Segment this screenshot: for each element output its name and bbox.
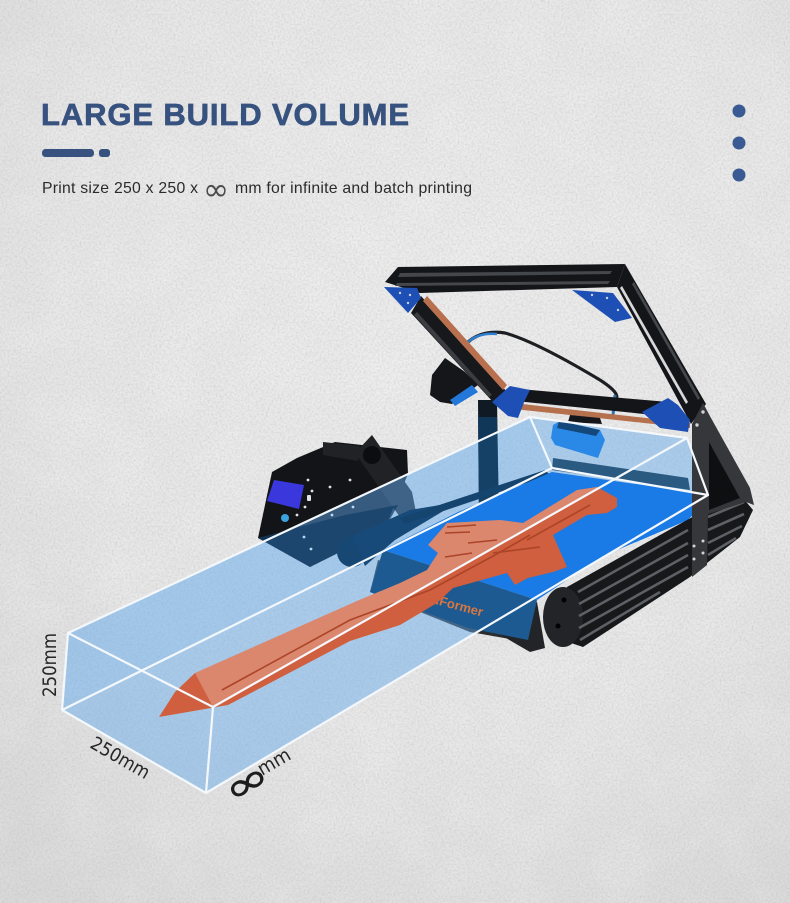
dimension label: infinite length: ∞ xyxy=(215,751,278,815)
rivets seen through the volume xyxy=(303,506,354,550)
print head carriage xyxy=(430,358,478,404)
dimension label: width: 250mm xyxy=(86,733,153,784)
blue build plate xyxy=(370,472,712,640)
roller arm xyxy=(337,470,550,567)
dimension label: height: 250mm xyxy=(40,633,61,697)
right upright xyxy=(617,264,706,424)
bracket rivets xyxy=(399,292,619,311)
lower crossbar xyxy=(506,388,668,416)
control box xyxy=(258,435,418,567)
sword print xyxy=(159,487,640,717)
dark shapes seen through the volume xyxy=(258,417,690,567)
decorative three dots xyxy=(732,104,746,182)
rail behind plate xyxy=(552,458,690,490)
title underline accent xyxy=(42,149,110,157)
subtitle text: Print size 250 x 250 x xyxy=(42,180,198,197)
title: LARGE BUILD VOLUME xyxy=(41,97,409,132)
lcd screen xyxy=(267,480,304,509)
subtitle text: ∞ xyxy=(203,172,229,208)
subtitle text: mm for infinite and batch printing xyxy=(235,180,472,197)
brand text on plate: iFormer xyxy=(434,592,485,619)
finned roller housing xyxy=(543,403,754,647)
control box buttons and rivets xyxy=(296,479,351,516)
left upright xyxy=(411,296,507,402)
sword highlights on top face xyxy=(195,487,640,707)
top bar xyxy=(385,264,625,293)
translucent build volume faces xyxy=(62,417,708,793)
sword fuller and guard grooves xyxy=(222,505,590,690)
dimension label: infinite length: mm xyxy=(254,744,295,780)
build volume white outline xyxy=(62,417,708,793)
blue print head carriage xyxy=(551,421,605,458)
dark base under build plate xyxy=(370,560,536,642)
subtitle text xyxy=(42,172,472,208)
cable xyxy=(468,332,617,400)
blue corner brackets xyxy=(384,287,690,432)
side plate xyxy=(692,403,754,577)
plate front face xyxy=(370,550,537,640)
spool holder xyxy=(323,435,418,522)
vertical support post xyxy=(478,400,499,525)
printer: rear frame xyxy=(384,264,706,525)
control knob xyxy=(281,514,289,522)
